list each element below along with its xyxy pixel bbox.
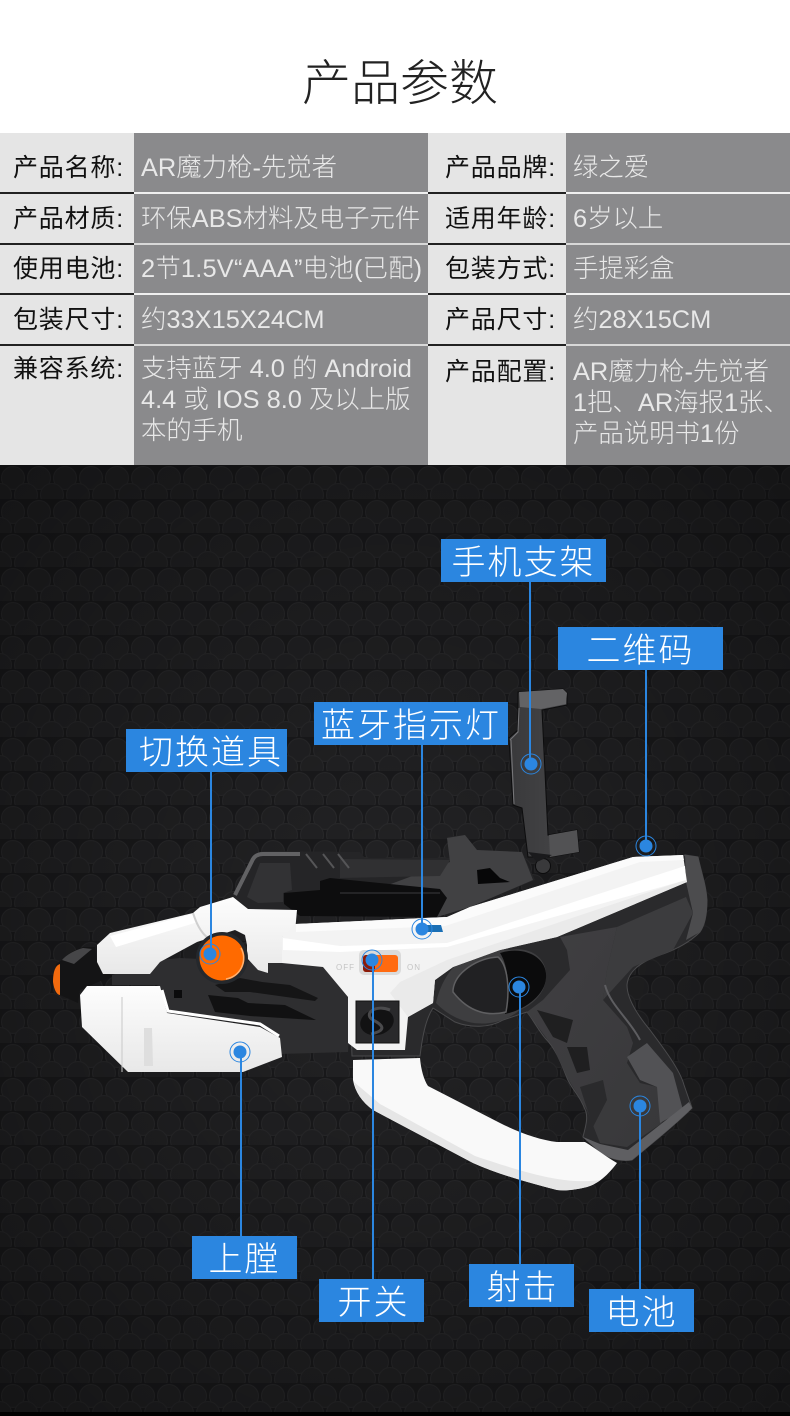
callout: 射击 pointer xyxy=(509,977,529,1264)
panel: parameter table xyxy=(0,133,790,465)
row 5: 1把、AR海报1张、 xyxy=(573,389,789,417)
trigger guard xyxy=(436,949,546,1024)
row 2: 6岁以上 xyxy=(573,205,663,233)
main white body xyxy=(282,855,687,1050)
gun illustration xyxy=(53,689,707,1190)
row 2: 产品材质: xyxy=(13,205,124,233)
row 4: 约33X15X24CM xyxy=(141,306,324,334)
row 5 xyxy=(13,355,789,448)
row 1: AR魔力枪-先觉者 xyxy=(141,154,337,182)
power switch xyxy=(336,950,421,975)
row 5: 产品说明书1份 xyxy=(573,420,739,448)
muzzle xyxy=(53,947,112,1003)
row 1 xyxy=(13,154,649,182)
row 3: 包装方式: xyxy=(445,255,556,283)
power switch: OFF xyxy=(336,963,355,972)
row 5: 产品配置: xyxy=(445,358,556,386)
label: 开关 xyxy=(319,1279,424,1322)
row 1: 产品名称: xyxy=(13,154,124,182)
row 4: 约28X15CM xyxy=(573,306,711,334)
row 2: 环保ABS材料及电子元件 xyxy=(141,205,420,233)
panel: dark product diagram xyxy=(0,465,790,1416)
front upper white xyxy=(97,897,297,974)
orange switch button xyxy=(196,932,248,984)
label: 切换道具: 切换道具 xyxy=(139,734,283,772)
label: 二维码 xyxy=(558,627,723,670)
label: 蓝牙指示灯: 蓝牙指示灯 xyxy=(321,707,501,745)
callout: 上膛 pointer xyxy=(230,1042,250,1236)
label: 开关: 开关 xyxy=(338,1284,410,1322)
label: 手机支架: 手机支架 xyxy=(452,544,596,582)
callout: 蓝牙指示灯 pointer xyxy=(412,745,432,939)
label: 二维码: 二维码 xyxy=(586,632,694,670)
label: 射击 xyxy=(469,1264,574,1307)
row 2: 适用年龄: xyxy=(445,205,556,233)
row 3 xyxy=(13,255,675,283)
grip highlight xyxy=(627,1043,683,1123)
row 3: 手提彩盒 xyxy=(573,255,675,283)
row 3: 2节1.5V“AAA”电池(已配) xyxy=(141,255,422,283)
row 2 xyxy=(13,205,663,233)
row 1: 产品品牌: xyxy=(445,154,556,182)
row 4: 包装尺寸: xyxy=(13,306,124,334)
grip upper panel xyxy=(603,897,693,1000)
label: 射击: 射击 xyxy=(486,1269,558,1307)
row 5: 兼容系统: xyxy=(13,355,124,383)
row 5: 4.4 或 IOS 8.0 及以上版 xyxy=(141,386,411,414)
label: 上膛 xyxy=(192,1236,297,1279)
label: 电池 xyxy=(589,1289,694,1332)
row 1: 绿之爱 xyxy=(573,154,649,182)
callout: 开关 pointer xyxy=(362,950,382,1279)
top rail xyxy=(233,835,535,917)
callout: 手机支架 pointer xyxy=(521,582,541,774)
mid dark body xyxy=(112,958,350,1054)
callout: 二维码 pointer xyxy=(636,670,656,856)
phone holder xyxy=(509,689,579,874)
row 3: 使用电池: xyxy=(13,255,124,283)
label: 上膛: 上膛 xyxy=(208,1241,280,1279)
S badge xyxy=(356,1001,399,1043)
row 5: AR魔力枪-先觉者 xyxy=(573,358,769,386)
label: 电池: 电池 xyxy=(606,1294,678,1332)
bluetooth light xyxy=(420,925,443,932)
front lower white xyxy=(80,986,282,1072)
row 4: 产品尺寸: xyxy=(445,306,556,334)
callout: 切换道具 pointer xyxy=(200,772,220,964)
power switch: ON xyxy=(407,963,421,972)
row 4 xyxy=(13,306,711,334)
grip centre panel xyxy=(527,927,662,1147)
tail cap xyxy=(685,855,707,940)
row 5: 支持蓝牙 4.0 的 Android xyxy=(141,355,412,383)
title: 产品参数 xyxy=(302,57,498,111)
callout: 电池 pointer xyxy=(630,1096,650,1289)
lower loop xyxy=(353,1058,617,1190)
row 5: 本的手机 xyxy=(141,417,243,445)
grip xyxy=(350,855,707,1161)
